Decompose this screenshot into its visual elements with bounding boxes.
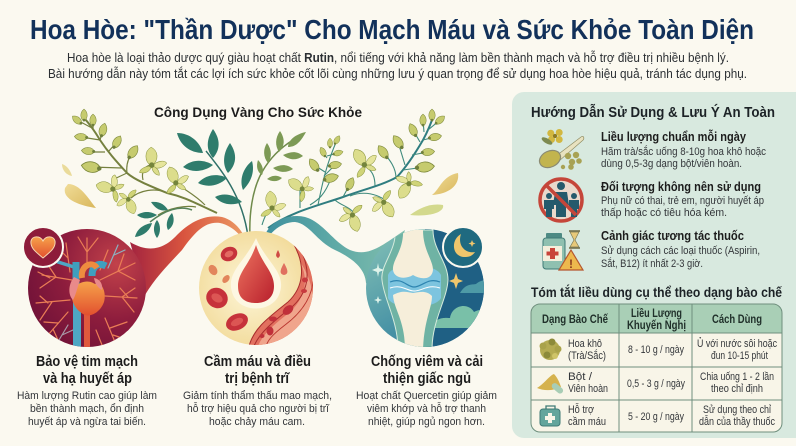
item: dosage: dùng 0,5-3g dạng bột/viên hoàn.	[601, 158, 742, 170]
intro text	[48, 50, 747, 81]
row: powder and pills: Viên hoàn	[568, 383, 608, 395]
row: dried flower	[568, 337, 777, 362]
icon: medicine bottle, hourglass and warning: !	[569, 257, 573, 271]
panel heading: Hướng Dẫn Sử Dụng & Lưu Ý An Toàn	[531, 103, 775, 121]
row: bleeding support: Hỗ trợ	[568, 403, 594, 416]
benefit: heart: và hạ huyết áp	[43, 371, 132, 387]
benefit: heart: huyết áp và ngừa tai biến.	[28, 416, 146, 428]
benefit: inflammation and sleep: viêm khớp và hỗ trợ thanh	[367, 402, 486, 415]
benefit: bleeding: Cầm máu và điều	[204, 354, 311, 370]
table header	[542, 308, 762, 332]
dosage table	[531, 304, 782, 432]
heading: benefits: Công Dụng Vàng Cho Sức Khỏe	[154, 105, 362, 120]
item: drug interactions: Sử dụng cách các loại thuốc (Aspirin,	[601, 245, 760, 257]
illustration: right flowering branch	[261, 109, 458, 234]
row: powder and pills: Bột /	[568, 371, 593, 383]
illustration: joint stem ribbon	[262, 216, 405, 295]
row: powder and pills: 0,5 - 3 g / ngày	[627, 378, 685, 390]
intro text: Hoa hòe là loại thảo dược quý giàu hoạt chất Rutin, nổi tiếng với khả năng làm bền thành mạch và hỗ trợ điều trị nhiều bệnh lý.	[67, 50, 729, 65]
row: bleeding support: cầm máu	[568, 416, 606, 428]
icon: powder and capsule	[537, 374, 564, 395]
table header: Dạng Bào Chế	[542, 314, 609, 326]
benefit: bleeding: hoặc chảy máu cam.	[209, 416, 305, 428]
item: drug interactions: Cảnh giác tương tác thuốc	[601, 229, 744, 243]
row: bleeding support: 5 - 20 g / ngày	[628, 411, 684, 423]
illustration: heart stem ribbon	[130, 216, 250, 295]
illustration: heart circle	[28, 229, 146, 350]
benefit: inflammation and sleep: thiện giấc ngủ	[383, 371, 471, 387]
item: contraindications: Phụ nữ có thai, trẻ em, người huyết áp	[601, 195, 764, 207]
illustration: left flowering branch	[62, 109, 217, 217]
icon: medicine bottle, hourglass and warning	[543, 231, 583, 271]
benefit: inflammation and sleep: Chống viêm và cải	[371, 354, 483, 370]
row: bleeding support	[568, 403, 775, 428]
icon: spoon with flowers	[537, 129, 584, 171]
row: powder and pills: Chia uống 1 - 2 lần	[700, 371, 774, 383]
panel: usage and safety	[512, 92, 796, 438]
row: dried flower: Ủ với nước sôi hoặc	[697, 337, 777, 350]
table header: Liều Lượng	[631, 308, 682, 320]
benefit: inflammation and sleep: nhiệt, giúp ngủ ngon hơn.	[368, 416, 485, 428]
row: powder and pills	[568, 371, 774, 395]
row: dried flower: (Trà/Sắc)	[568, 349, 606, 362]
row: dried flower: 8 - 10 g / ngày	[628, 344, 684, 356]
benefit: heart: Bảo vệ tim mạch	[36, 354, 138, 370]
icon: first aid kit	[540, 406, 560, 426]
benefit: bleeding: trị bệnh trĩ	[225, 371, 290, 387]
item: drug interactions	[601, 229, 760, 270]
item: dosage	[601, 129, 766, 170]
benefit: heart	[17, 354, 157, 428]
benefit: bleeding	[183, 354, 332, 428]
item: dosage: Hãm trà/sắc uống 8-10g hoa khô hoặc	[601, 145, 766, 158]
icon: small heart badge	[23, 227, 63, 267]
benefit: bleeding: hỗ trợ hiệu quả cho người bị trĩ	[187, 402, 330, 415]
item: dosage: Liều lượng chuẩn mỗi ngày	[601, 129, 746, 144]
item: drug interactions: Sắt, B12) ít nhất 2-3 giờ.	[601, 257, 703, 270]
illustration: joint circle	[366, 228, 484, 347]
row: bleeding support: Sử dụng theo chỉ	[703, 404, 771, 416]
table header: Khuyến Nghị	[627, 320, 686, 332]
item: contraindications: thấp hoặc có tiêu hóa kém.	[601, 207, 727, 219]
table header: Cách Dùng	[712, 314, 762, 326]
row: dried flower: Hoa khô	[568, 338, 602, 350]
benefit: heart: bền thành mạch, ổn định	[30, 403, 144, 415]
benefit: heart: Hàm lượng Rutin cao giúp làm	[17, 390, 157, 402]
row: bleeding support: dẫn của thầy thuốc	[699, 415, 775, 428]
benefit: bleeding: Giảm tính thẩm thấu mao mạch,	[183, 390, 332, 402]
illustration: blood circle	[199, 231, 320, 346]
row: powder and pills: theo chỉ định	[711, 383, 763, 395]
benefit: inflammation and sleep: Hoạt chất Quercetin giúp giảm	[356, 390, 497, 402]
icon: dried flowers	[540, 338, 562, 360]
item: contraindications: Đối tượng không nên sử dụng	[601, 180, 761, 194]
icon: prohibited people	[540, 179, 582, 221]
row: dried flower: đun 10-15 phút	[711, 350, 768, 362]
intro text: Bài hướng dẫn này tóm tắt các lợi ích sức khỏe cốt lõi cùng những lưu ý quan trọng để sử dụng hoa hòe hiệu quả, tránh tác dụng phụ.	[48, 66, 747, 81]
illustration: green leaf sprigs	[135, 129, 306, 245]
item: contraindications	[601, 180, 764, 219]
benefit: inflammation and sleep	[356, 354, 497, 428]
